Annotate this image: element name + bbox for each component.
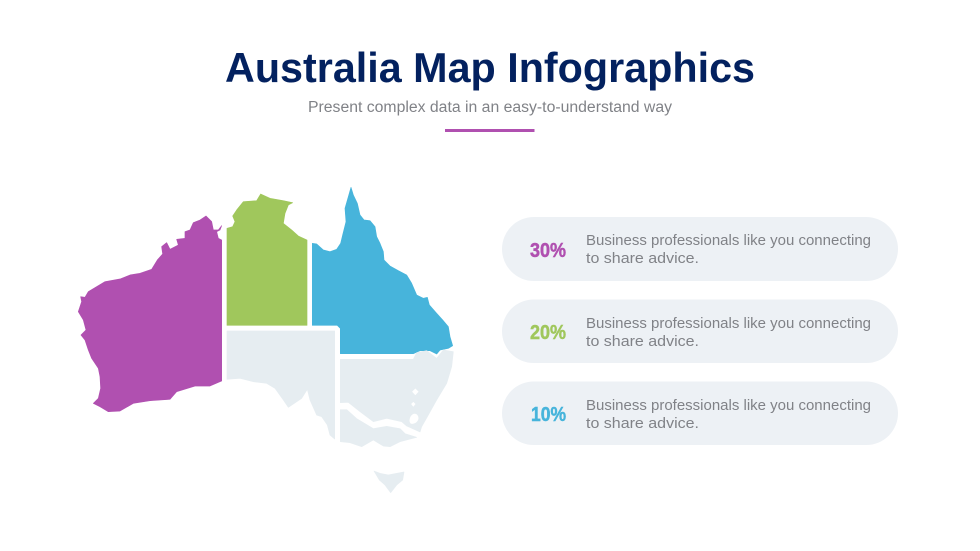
region: South Australia <box>227 331 335 439</box>
description: Business professionals like you connecting <box>586 232 871 249</box>
description: Business professionals like you connecting <box>586 315 871 332</box>
region: Northern Territory <box>227 194 307 325</box>
map of Australia <box>78 187 453 493</box>
region: Tasmania <box>374 471 404 493</box>
percentage: 10%: 10% <box>531 404 566 426</box>
region: New South Wales <box>340 350 453 432</box>
percentage: 30%: 30% <box>530 240 566 262</box>
description: to share advice. <box>586 333 699 350</box>
region: Western Australia <box>78 216 222 412</box>
description: Business professionals like you connecting <box>586 397 871 414</box>
stat pill: 20% <box>502 300 898 363</box>
region: Victoria <box>340 410 417 447</box>
description: to share advice. <box>586 415 699 432</box>
stat pill: 30% <box>502 217 898 281</box>
title underline <box>445 129 534 132</box>
title: Australia Map Infographics <box>225 44 755 91</box>
percentage: 20%: 20% <box>530 322 566 344</box>
stat pill: 10% <box>502 382 898 445</box>
description: to share advice. <box>586 250 699 267</box>
subtitle: Present complex data in an easy-to-understand way <box>308 99 672 116</box>
region: Queensland <box>312 187 453 354</box>
